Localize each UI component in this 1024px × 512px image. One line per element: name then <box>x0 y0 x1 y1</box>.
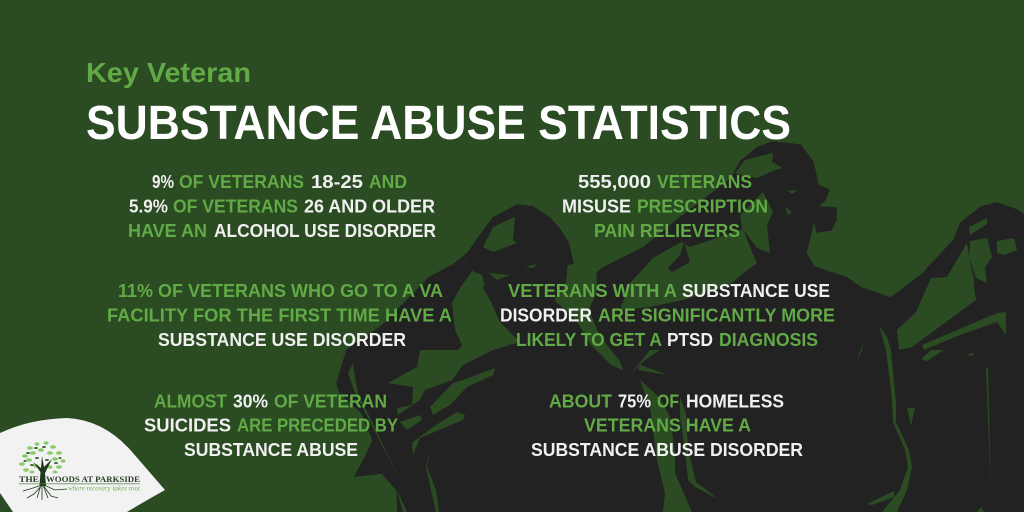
stat: prescription pain relievers: PRESCRIPTION <box>637 196 768 216</box>
stat: PTSD diagnosis: DISORDER <box>500 306 592 326</box>
stat: alcohol use disorder: 5.9% <box>129 196 168 216</box>
stat: homeless veterans: 75% <box>618 392 651 412</box>
stat: suicides: ALMOST <box>154 392 227 412</box>
logo: The Woods at Parkside: WOODS AT PARKSIDE <box>46 474 140 484</box>
stat: PTSD diagnosis: ARE SIGNIFICANTLY MORE <box>598 306 835 326</box>
stat: PTSD diagnosis <box>500 281 835 350</box>
stat: suicides: SUICIDES <box>144 416 231 436</box>
stat: alcohol use disorder: 26 AND OLDER <box>304 196 435 216</box>
left soldier details <box>348 217 537 512</box>
stat: first-time VA facility <box>107 281 452 350</box>
stat: homeless veterans: VETERANS HAVE A <box>584 416 751 436</box>
stat: prescription pain relievers: 555,000 <box>578 172 651 192</box>
stat: alcohol use disorder: OF VETERANS <box>179 172 304 192</box>
title: SUBSTANCE ABUSE STATISTICS <box>86 97 791 150</box>
stat: alcohol use disorder: ALCOHOL USE DISORDER <box>214 221 436 241</box>
logo wordmark: THE <box>19 474 39 484</box>
logo leaf panel <box>0 418 165 512</box>
stat: alcohol use disorder: OF VETERANS <box>173 196 298 216</box>
stat: suicides: OF VETERAN <box>274 392 387 412</box>
silhouette: saluting soldiers <box>337 142 1024 512</box>
stat: first-time VA facility: SUBSTANCE USE DISORDER <box>158 330 406 350</box>
stat: homeless veterans: HOMELESS <box>686 392 784 412</box>
stat: suicides: 30% <box>233 392 268 412</box>
stat: first-time VA facility: 11% OF VETERANS WHO GO TO A VA <box>118 281 443 301</box>
stat: PTSD diagnosis: PTSD <box>667 330 713 350</box>
stat: prescription pain relievers <box>562 172 768 241</box>
stat: suicides: SUBSTANCE ABUSE <box>184 440 358 460</box>
stat: homeless veterans <box>531 392 803 460</box>
stat: homeless veterans: OF <box>657 392 679 412</box>
stat: PTSD diagnosis: SUBSTANCE USE <box>682 281 830 301</box>
stat: alcohol use disorder <box>128 172 436 241</box>
stat: first-time VA facility: FACILITY FOR THE FIRST TIME HAVE A <box>107 306 452 326</box>
logo tagline: where recovery takes root <box>68 484 141 492</box>
centre soldier details <box>620 153 915 512</box>
stat: alcohol use disorder: 18-25 <box>311 172 363 192</box>
stat: prescription pain relievers: PAIN RELIEVERS <box>594 221 740 241</box>
stat: alcohol use disorder: HAVE AN <box>128 221 207 241</box>
subtitle: Key Veteran <box>86 57 251 88</box>
stat: PTSD diagnosis: LIKELY TO GET A <box>516 330 662 350</box>
stat: suicides: ARE PRECEDED BY <box>237 416 398 436</box>
stat: PTSD diagnosis: DIAGNOSIS <box>719 330 818 350</box>
right soldier details <box>897 218 1017 512</box>
icon: tree <box>19 441 67 500</box>
stat: homeless veterans: ABOUT <box>549 392 612 412</box>
stat: suicides <box>144 392 398 460</box>
stat: prescription pain relievers: VETERANS <box>657 172 752 192</box>
logo underline <box>19 482 140 485</box>
stat: prescription pain relievers: MISUSE <box>562 196 631 216</box>
stat: homeless veterans: SUBSTANCE ABUSE DISORDER <box>531 440 803 460</box>
stat: PTSD diagnosis: VETERANS WITH A <box>508 281 677 301</box>
logo: The Woods at Parkside <box>19 441 141 500</box>
stat: alcohol use disorder: AND <box>369 172 407 192</box>
stat: alcohol use disorder: 9% <box>152 172 174 192</box>
